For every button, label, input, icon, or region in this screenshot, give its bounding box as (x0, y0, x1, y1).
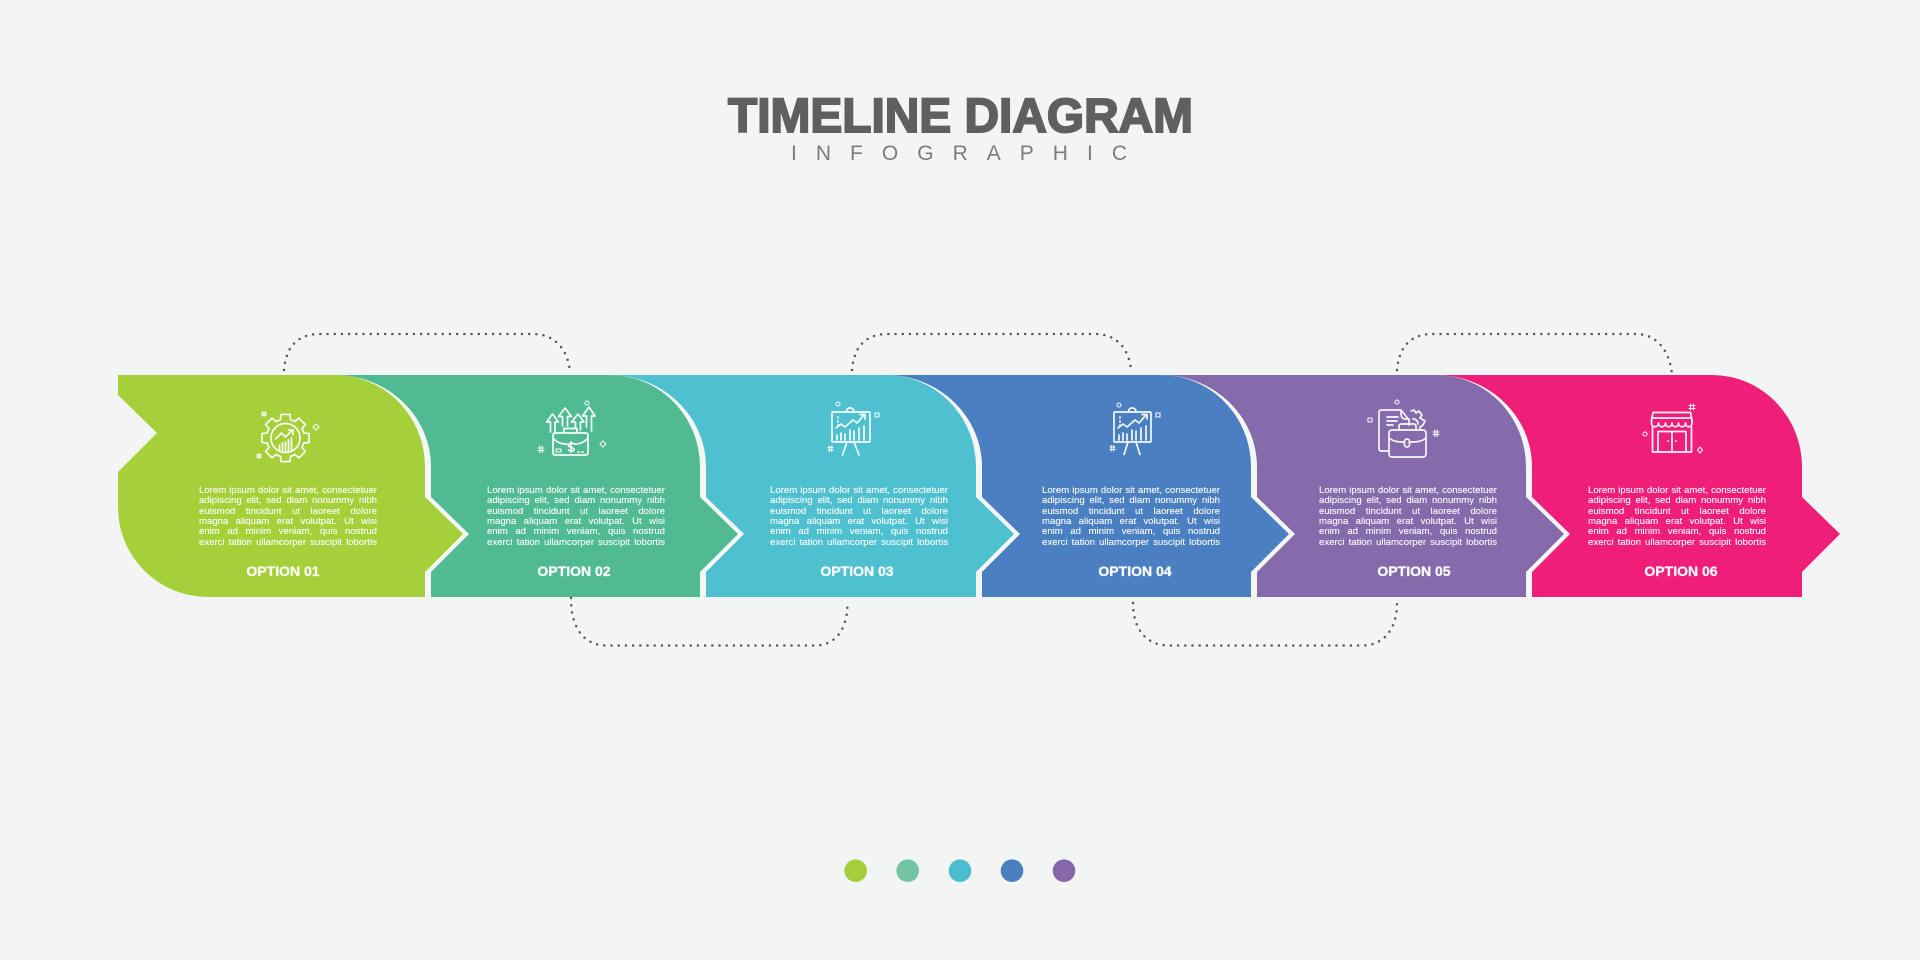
text: option 02 description: adipiscing elit, sed diam nonummy nibh (487, 495, 665, 506)
subtitle: INFOGRAPHIC (791, 142, 1127, 165)
icon: presentation board (1110, 403, 1160, 454)
text: option 05 description: exerci tation ullamcorper suscipit lobortis (1319, 537, 1497, 548)
text: option 05 description: enim ad minim veniam, quis nostrud (1319, 526, 1497, 537)
text: option 01 description: exerci tation ullamcorper suscipit lobortis (199, 537, 377, 548)
text: option 04 description: enim ad minim veniam, quis nostrud (1042, 526, 1220, 537)
text: option 03 description: magna aliquam erat volutpat. Ut wisi (770, 516, 948, 527)
text: option 03 description (770, 485, 948, 548)
text: option 04 description: euismod tincidunt ut laoreet dolore (1042, 506, 1220, 517)
title: TIMELINE DIAGRAM (728, 90, 1193, 143)
text: option 01 description: adipiscing elit, sed diam nonummy nibh (199, 495, 377, 506)
text: option 03 description: euismod tincidunt ut laoreet dolore (770, 506, 948, 517)
panel: option 01 (118, 375, 469, 597)
text: option 06 description: euismod tincidunt ut laoreet dolore (1588, 506, 1766, 517)
icon: presentation board (828, 402, 879, 455)
text: option 05 description: Lorem ipsum dolor sit amet, consectetuer (1319, 485, 1497, 496)
text: option 02 description: Lorem ipsum dolor sit amet, consectetuer (487, 485, 665, 496)
text: option 03 description: enim ad minim veniam, quis nostrud (770, 526, 948, 537)
text: option 01 description: Lorem ipsum dolor sit amet, consectetuer (199, 485, 377, 496)
text: option 06 description: Lorem ipsum dolor sit amet, consectetuer (1588, 485, 1766, 496)
text: option 02 description: euismod tincidunt ut laoreet dolore (487, 506, 665, 517)
text: option 06 description: magna aliquam erat volutpat. Ut wisi (1588, 516, 1766, 527)
text: option 04 description (1042, 485, 1220, 548)
text: option 04 description: adipiscing elit, sed diam nonummy nibh (1042, 495, 1220, 506)
text: option 06 description (1588, 485, 1766, 548)
text: option 02 description: magna aliquam erat volutpat. Ut wisi (487, 516, 665, 527)
text: option 05 description: adipiscing elit, sed diam nonummy nibh (1319, 495, 1497, 506)
label: option 03: OPTION 03 (820, 563, 894, 579)
text: option 05 description (1319, 485, 1497, 548)
label: option 02: OPTION 02 (537, 563, 611, 579)
panel: option 02 (337, 375, 744, 597)
icon: storefront (1643, 404, 1702, 453)
icon: document and briefcase (1368, 400, 1439, 457)
panel: option 03 (612, 375, 1020, 597)
text: option 05 description: euismod tincidunt ut laoreet dolore (1319, 506, 1497, 517)
panel: option 04 (890, 375, 1295, 597)
panel: option 05 (1163, 375, 1570, 597)
text: option 02 description: enim ad minim veniam, quis nostrud (487, 526, 665, 537)
text: option 04 description: magna aliquam erat volutpat. Ut wisi (1042, 516, 1220, 527)
text: option 02 description: exerci tation ullamcorper suscipit lobortis (487, 537, 665, 548)
text: option 03 description: adipiscing elit, sed diam nonummy nibh (770, 495, 948, 506)
text: option 06 description: exerci tation ullamcorper suscipit lobortis (1588, 537, 1766, 548)
text: option 01 description: magna aliquam erat volutpat. Ut wisi (199, 516, 377, 527)
text: option 05 description: magna aliquam erat volutpat. Ut wisi (1319, 516, 1497, 527)
text: option 01 description: euismod tincidunt ut laoreet dolore (199, 506, 377, 517)
label: option 06: OPTION 06 (1644, 563, 1718, 579)
panel: option 06 (1438, 375, 1840, 597)
text: option 04 description: exerci tation ullamcorper suscipit lobortis (1042, 537, 1220, 548)
text: option 06 description: enim ad minim veniam, quis nostrud (1588, 526, 1766, 537)
text: option 03 description: exerci tation ullamcorper suscipit lobortis (770, 537, 948, 548)
label: option 01: OPTION 01 (246, 563, 320, 579)
text: option 02 description (487, 485, 665, 548)
text: option 04 description: Lorem ipsum dolor sit amet, consectetuer (1042, 485, 1220, 496)
text: option 03 description: Lorem ipsum dolor sit amet, consectetuer (770, 485, 948, 496)
label: option 05: OPTION 05 (1377, 563, 1451, 579)
label: option 04: OPTION 04 (1098, 563, 1172, 579)
icon: gear with chart (258, 412, 319, 462)
text: option 06 description: adipiscing elit, sed diam nonummy nibh (1588, 495, 1766, 506)
text: option 01 description: enim ad minim veniam, quis nostrud (199, 526, 377, 537)
icon: briefcase with arrows (538, 401, 606, 455)
text: option 01 description (199, 485, 377, 548)
legend dots (844, 859, 1076, 882)
